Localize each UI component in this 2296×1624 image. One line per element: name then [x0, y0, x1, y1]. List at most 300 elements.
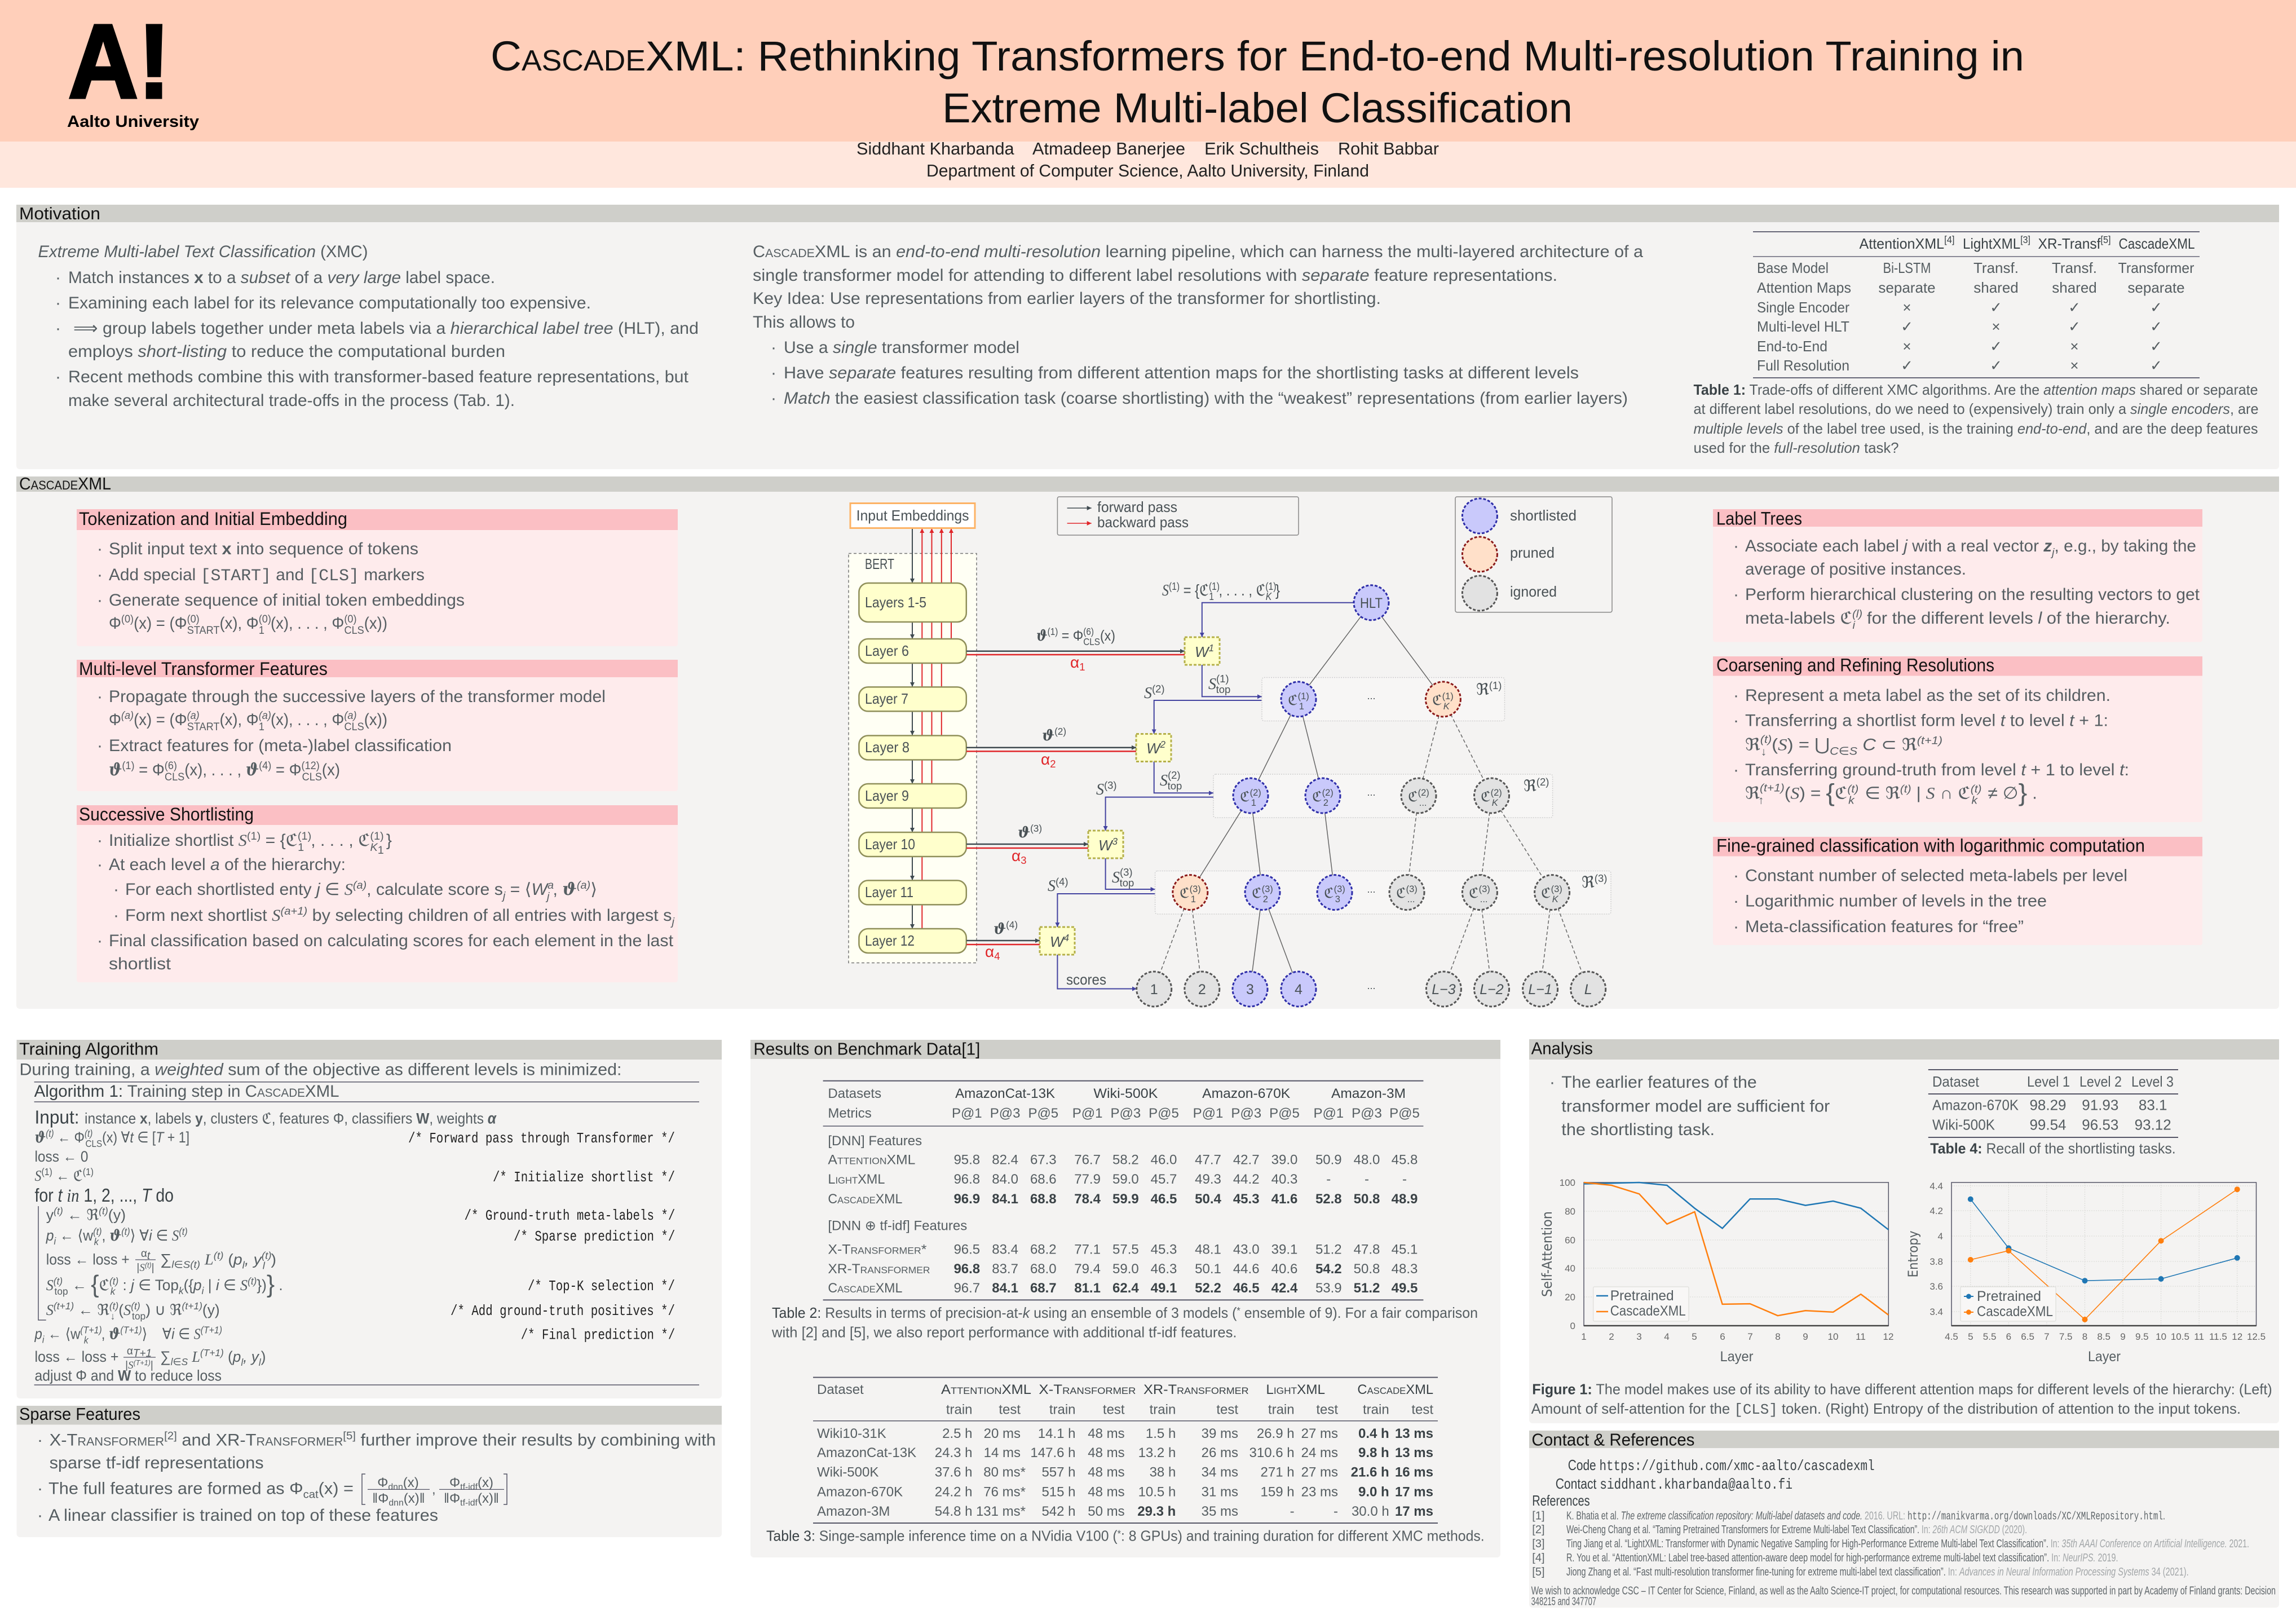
algorithm 1 pseudocode: |	[151, 1360, 153, 1371]
shortlist labels: }	[1275, 581, 1280, 599]
node labels: ℭ	[1432, 692, 1442, 708]
table 2: precision at k: 45.3	[1233, 1191, 1260, 1207]
panel: Coarsening and Refining Resolutions: Transferring a shortlist form level t to level t + 1:	[1745, 712, 2108, 730]
algorithm 1 pseudocode: ← ⟨w	[44, 1325, 81, 1342]
legend: pass direction	[1057, 497, 1299, 535]
table 1: trade-offs: ✓	[1990, 338, 2002, 355]
algorithm 1 pseudocode: l	[241, 1357, 244, 1368]
panel: Successive Shortlisting: j	[545, 890, 550, 903]
chart: entropy by layer: 4.2	[1929, 1206, 1943, 1216]
algorithm 1 pseudocode: (x) ∀	[102, 1129, 130, 1146]
table 1: trade-offs: ✓	[1901, 357, 1913, 374]
feature and weight labels: α	[1041, 751, 1050, 768]
table 1: trade-offs: ✓	[1990, 357, 2002, 374]
bullet list with formula: sparse tf-idf representations	[50, 1454, 264, 1472]
text block: XMC background: ·	[55, 294, 61, 312]
contact details: Code https://github.com/xmc-aalto/cascadexml	[1568, 1457, 1875, 1475]
text block: CascadeXML summary: This allows to	[753, 313, 855, 332]
table 2: precision at k: 78.4	[1074, 1191, 1101, 1207]
bullet list with formula: (x)‖	[478, 1491, 499, 1506]
panel: Tokenization and Initial Embedding: (0)	[187, 613, 200, 625]
table 3: inference time: XR-Transformer	[1143, 1382, 1249, 1397]
panel: Contact and References	[1529, 1430, 2279, 1608]
table 1: trade-offs: ✓	[2150, 299, 2162, 316]
algorithm 1 pseudocode: )	[261, 1348, 266, 1365]
table 2: precision at k: 40.3	[1271, 1172, 1297, 1187]
heading: Motivation: Motivation	[19, 204, 100, 223]
chart: self-attention by layer: 1	[1581, 1331, 1587, 1342]
bullet list with formula: [2]	[164, 1430, 177, 1442]
algorithm 1 pseudocode: ,	[101, 1227, 109, 1244]
panel: Results on Benchmark Data	[750, 1039, 1500, 1557]
algorithm 1 pseudocode: α	[127, 1345, 133, 1357]
text block: XMC background: Extreme Multi-label Text Classification (XMC)	[38, 242, 368, 261]
panel: Coarsening and Refining Resolutions: (	[1785, 784, 1790, 803]
algorithm 1 pseudocode: /* Final prediction */	[521, 1326, 675, 1343]
table 3: inference time: 29.3 h	[1137, 1504, 1176, 1519]
table 2: precision at k: 49.3	[1195, 1172, 1221, 1187]
table 2: precision at k: 46.5	[1233, 1281, 1260, 1296]
table 3 caption: : 8 GPUs) and training duration for different XMC methods.	[1121, 1528, 1485, 1544]
table 3: inference time: 26.9 h	[1257, 1426, 1295, 1441]
chart: entropy by layer: 10	[2156, 1331, 2166, 1342]
algorithm 1 pseudocode: :	[118, 1277, 131, 1294]
algorithm 1 pseudocode: (t)	[54, 1205, 63, 1216]
table 3: inference time: Amazon-3M	[817, 1504, 890, 1519]
table 1: trade-offs: AttentionXML	[1860, 235, 1948, 252]
panel: Coarsening and Refining Resolutions: (	[1772, 736, 1778, 754]
authors: Siddhant Kharbanda Atmadeep Banerjee Erik Schultheis Rohit Babbar	[856, 139, 1439, 158]
panel: Multi-level Transformer Features: ϑ	[109, 760, 122, 780]
table 3: inference time: 271 h	[1261, 1464, 1295, 1480]
panel: Successive Shortlisting: For each shortlisted enty j ∈ S	[125, 880, 353, 899]
table 3: inference time: 159 h	[1261, 1484, 1295, 1500]
table 2: precision at k: 59.0	[1112, 1172, 1139, 1187]
algorithm 1 pseudocode: (t)	[46, 1128, 54, 1139]
table 3: inference time: 39 ms	[1202, 1426, 1238, 1441]
algorithm 1 pseudocode: l∈S	[171, 1356, 188, 1367]
chart: entropy by layer: 5.5	[1983, 1331, 1996, 1342]
text block: XMC background: make several architectural trade-offs in the process (Tab. 1).	[68, 391, 515, 410]
panel: Successive Shortlisting: ·	[113, 880, 119, 899]
table 2: precision at k: 48.0	[1354, 1153, 1380, 1168]
table 2: precision at k: 59.9	[1112, 1191, 1139, 1207]
table 3: inference time: -	[1334, 1504, 1338, 1519]
table 2: precision at k: 53.9	[1315, 1281, 1342, 1296]
text block: CascadeXML summary: Match the easiest classification task (coarse shortlisting) with the “weakest” representations (from earlier layers)	[784, 389, 1628, 408]
panel: Tokenization and Initial Embedding: CLS	[345, 624, 364, 637]
panel: Successive Shortlisting: (1)	[298, 830, 311, 842]
algorithm 1 pseudocode: .	[275, 1277, 283, 1294]
tree nodes: shortlisted	[1233, 585, 1389, 1007]
table 2: precision at k: 77.9	[1074, 1172, 1101, 1187]
references list: Ting Jiang et al. “LightXML: Transformer with Dynamic Negative Sampling for High-Performance Extreme Multi-label Text Classification”. In: 35th AAAI Conference on Artificial Intelligence. 2021.	[1566, 1538, 2249, 1550]
algorithm 1 pseudocode: /* Sparse prediction */	[514, 1228, 675, 1245]
table 1: trade-offs: Full Resolution	[1757, 357, 1849, 374]
chart: self-attention by layer: 7	[1747, 1331, 1753, 1342]
table 3: inference time: AttentionXML	[941, 1382, 1031, 1397]
panel: Label Trees: ·	[1733, 537, 1739, 555]
table 2: precision at k: 77.1	[1074, 1242, 1101, 1257]
feature and weight labels: ϑ	[1042, 727, 1054, 744]
table 2: precision at k: 45.8	[1392, 1153, 1418, 1168]
input embeddings box: Input Embeddings	[856, 507, 969, 524]
table 2 caption: Table 2: Results in terms of precision-at-k using an ensemble of 3 models (	[772, 1304, 1246, 1321]
text block: XMC background: Match instances x to a subset of a very large label space.	[68, 268, 495, 287]
table 3: inference time: 0.4 h	[1358, 1426, 1389, 1441]
table 3: inference time: 26 ms	[1202, 1445, 1238, 1460]
panel: Multi-level Transformer Features: (x))	[364, 710, 387, 729]
chart: entropy by layer: 12	[2232, 1331, 2242, 1342]
feature and weight labels: (x)	[1100, 627, 1115, 644]
node labels: (1)	[1298, 691, 1309, 701]
text block: XMC background: employs short-listing to reduce the computational burden	[68, 342, 505, 361]
bullet list with formula: [5]	[343, 1430, 356, 1442]
heading: Sparse Features: Sparse Features	[19, 1404, 140, 1424]
layer to classifier connections	[966, 651, 1185, 945]
table 2: precision at k: 48.1	[1195, 1242, 1221, 1257]
node labels: L	[1584, 982, 1592, 998]
logo: Aalto A!: A!	[68, 3, 170, 120]
references list: [2]	[1532, 1524, 1545, 1536]
table 3: inference time: -	[1290, 1504, 1295, 1519]
shortlist labels: (3)	[1104, 779, 1117, 791]
algorithm 1 pseudocode: (T+1)	[134, 1359, 151, 1367]
table 3: inference time: LightXML	[1266, 1382, 1325, 1397]
panel: Tokenization and Initial Embedding: (x), Φ	[219, 614, 259, 633]
node labels: ...	[1367, 884, 1376, 895]
table 1: trade-offs: Bi-LSTM	[1883, 259, 1931, 276]
panel: Coarsening and Refining Resolutions: ⊂ ℜ	[1880, 736, 1913, 754]
tree edges	[1154, 603, 1588, 989]
title: CascadeXML: Rethinking Transformers for End-to-end Multi-resolution Training in	[491, 33, 2024, 80]
chart: self-attention by layer: 11	[1856, 1331, 1866, 1342]
text block: XMC background: ·	[55, 319, 61, 338]
chart: self-attention by layer	[1539, 1177, 1893, 1365]
node labels: K	[1443, 701, 1450, 712]
table 3: inference time: 48 ms	[1088, 1464, 1125, 1480]
algorithm 1 pseudocode: }	[267, 1270, 275, 1298]
bullet list with formula: further improve their results by combining with	[356, 1431, 716, 1450]
bullet: earlier features: transformer model are sufficient for	[1561, 1097, 1830, 1115]
text block: CascadeXML summary: ·	[771, 338, 776, 357]
table 2: precision at k: P@3	[990, 1106, 1020, 1121]
table 2: precision at k: 39.1	[1271, 1242, 1297, 1257]
panel: Tokenization and Initial Embedding: Tokenization and Initial Embedding	[79, 509, 347, 529]
references list: References	[1532, 1492, 1590, 1509]
table 1: trade-offs: ×	[1992, 318, 2001, 335]
panel: Multi-level Transformer Features: (a)	[187, 709, 200, 722]
algorithm 1 pseudocode: (t)	[109, 1276, 118, 1287]
legend: node states: pruned	[1510, 544, 1555, 561]
algorithm 1 pseudocode: α	[141, 1248, 147, 1260]
panel: Multi-level Transformer Features: Propagate through the successive layers of the transformer model	[109, 687, 606, 706]
table 2: precision at k: 68.8	[1030, 1191, 1057, 1207]
table 3: inference time: train	[1049, 1402, 1076, 1418]
panel: Successive Shortlisting: j	[670, 916, 675, 928]
table 3: inference time: 515 h	[1041, 1484, 1076, 1500]
text block: XMC background: Recent methods combine this with transformer-based feature representations, but	[68, 368, 689, 386]
table 2: precision at k: 67.3	[1030, 1153, 1057, 1168]
table 1: trade-offs: [3]	[2020, 234, 2030, 245]
feature and weight labels: (3)	[1030, 823, 1042, 834]
panel: Analysis	[1529, 1039, 2279, 1423]
table 4: recall: Wiki-500K	[1932, 1116, 1995, 1133]
transformer layers: Layers 1-5	[865, 594, 926, 611]
panel: Multi-level Transformer Features: = Φ	[271, 761, 302, 779]
panel: Tokenization and Initial Embedding: (x) = (Φ	[134, 614, 187, 633]
chart: entropy by layer: Entropy	[1905, 1230, 1921, 1278]
table 1: trade-offs: ✓	[2068, 318, 2081, 335]
panel: Coarsening and Refining Resolutions: k	[1971, 795, 1978, 807]
panel: Multi-level Transformer Features: 1	[259, 721, 264, 733]
node labels	[1150, 595, 1592, 998]
algorithm 1 pseudocode: top	[55, 1286, 68, 1297]
chart: self-attention by layer: Layer	[1720, 1349, 1754, 1365]
bullet list with formula: The full features are formed as Φ	[48, 1480, 297, 1498]
algorithm 1 pseudocode: ϑ	[109, 1325, 120, 1343]
table 2: precision at k: 57.5	[1112, 1242, 1139, 1257]
table 2: precision at k: Metrics	[828, 1106, 872, 1121]
intro sentence: During training, a weighted sum of the objective as different levels is minimized:	[19, 1060, 621, 1079]
table 2: precision at k: 45.3	[1151, 1242, 1177, 1257]
panel: Successive Shortlisting: (a+1)	[280, 905, 307, 917]
table 3: inference time: 24.3 h	[935, 1445, 972, 1460]
algorithm 1 pseudocode: /* Ground-truth meta-labels */	[465, 1207, 675, 1224]
node labels: ...	[1419, 798, 1427, 808]
algorithm 1 pseudocode: (1)	[41, 1166, 52, 1177]
heading: Analysis: Analysis	[1531, 1039, 1593, 1058]
panel: Successive Shortlisting: }	[386, 831, 392, 850]
table 3: inference time: 27 ms	[1301, 1426, 1338, 1441]
algorithm 1 pseudocode: i ∈ S	[149, 1227, 179, 1244]
feature and weight labels: 3	[1021, 854, 1026, 866]
table 2: precision at k: 62.4	[1112, 1281, 1139, 1296]
contact details: Contact siddhant.kharbanda@aalto.fi	[1556, 1475, 1792, 1493]
transformer layers	[859, 583, 966, 953]
heading: Contact and References: Contact & References	[1531, 1430, 1694, 1449]
table 2: precision at k	[823, 1081, 1423, 1300]
panel: Tokenization and Initial Embedding: (x))	[364, 614, 387, 633]
chart: self-attention by layer: 80	[1565, 1206, 1575, 1217]
algorithm 1 pseudocode: (t)	[109, 1300, 118, 1312]
panel: Tokenization and Initial Embedding	[77, 509, 678, 646]
shortlist labels: = {ℭ	[1180, 581, 1209, 599]
bullet list with formula: ,	[432, 1482, 436, 1497]
table 2: precision at k: 51.2	[1315, 1242, 1342, 1257]
panel: Fine-grained classification: Logarithmic number of levels in the tree	[1745, 892, 2047, 911]
chart: entropy by layer: 7.5	[2059, 1331, 2073, 1342]
table 2: precision at k: 44.2	[1233, 1172, 1260, 1187]
references list: [3]	[1532, 1538, 1545, 1550]
panel: Multi-level Transformer Features: (1)	[122, 760, 135, 772]
table 1 caption: used for the full-resolution task?	[1694, 439, 1899, 456]
shortlist labels: S	[1096, 781, 1104, 798]
table 2: precision at k: P@5	[1149, 1106, 1179, 1121]
resolution level boxes: ℜ	[1476, 681, 1489, 698]
chart: entropy by layer: 6	[2006, 1331, 2011, 1342]
panel: Label Trees: , e.g., by taking the	[2055, 537, 2196, 555]
panel: Coarsening and Refining Resolutions: }	[2019, 779, 2027, 807]
shortlist labels: S	[1162, 582, 1169, 599]
table 1: trade-offs: [4]	[1944, 234, 1954, 245]
panel: Label Trees: l of the hierarchy.	[2038, 609, 2166, 628]
chart: entropy by layer: 9	[2120, 1331, 2126, 1342]
node labels: ...	[1480, 894, 1488, 904]
node labels: (3)	[1551, 884, 1562, 894]
table 1: trade-offs: [5]	[2100, 234, 2111, 245]
panel: Coarsening and Refining Resolutions: (t)	[1971, 783, 1982, 796]
algorithm 1 pseudocode: S	[35, 1167, 42, 1184]
node labels: 3	[1246, 982, 1254, 998]
table 3: inference time: Wiki-500K	[817, 1464, 878, 1480]
chart: self-attention by layer: 12	[1883, 1331, 1893, 1342]
node labels: L−3	[1432, 982, 1456, 998]
text block: XMC background: ⟹ group labels together under meta labels via a hierarchical label tree (HLT), and	[73, 319, 699, 338]
table 3 caption: Table 3: Singe-sample inference time on a NVidia V100 (	[766, 1528, 1132, 1544]
text block: XMC background	[38, 242, 699, 410]
algorithm 1 pseudocode: p	[232, 1348, 241, 1365]
panel: Multi-level Transformer Features: = Φ	[135, 761, 165, 779]
table 3: inference time: 50 ms	[1088, 1504, 1125, 1519]
table 2: precision at k: 50.4	[1195, 1191, 1222, 1207]
table 3: inference time: 542 h	[1041, 1504, 1076, 1519]
table 3: inference time: 10.5 h	[1138, 1484, 1176, 1500]
algorithm 1 pseudocode: ← ℭ	[52, 1167, 83, 1184]
table 1 caption: Table 1: Trade-offs of different XMC algorithms. Are the attention maps shared or separate	[1694, 381, 2258, 398]
panel: Sparse Features	[17, 1404, 722, 1537]
algorithm 1 pseudocode: i	[54, 1235, 56, 1247]
feature and weight labels: 1	[1079, 661, 1085, 673]
panel: Multi-level Transformer Features: (4)	[259, 760, 271, 772]
panel: Successive Shortlisting: by selecting children of all entries with largest s	[307, 906, 672, 925]
text block: CascadeXML summary: ·	[771, 364, 776, 382]
table 3: inference time: 13 ms	[1395, 1445, 1433, 1460]
panel: Successive Shortlisting: Final classification based on calculating scores for each element in the last	[109, 932, 674, 950]
table 2: precision at k: 68.2	[1030, 1242, 1057, 1257]
legend: pass direction: forward pass	[1097, 498, 1177, 515]
algorithm 1 pseudocode: Input:	[35, 1106, 79, 1127]
table 1: trade-offs: ✓	[1901, 318, 1913, 335]
chart: entropy by layer	[1905, 1181, 2266, 1365]
feature and weight labels: α	[985, 943, 994, 960]
node labels: 2	[1323, 798, 1328, 808]
panel: Successive Shortlisting: Successive Shortlisting	[79, 804, 254, 824]
table 2: precision at k: X-Transformer*	[828, 1242, 926, 1257]
table 2 caption: ensemble of 9). For a fair comparison	[1240, 1304, 1478, 1321]
table 1: trade-offs: ✓	[2068, 299, 2081, 316]
table 3: inference time: 147.6 h	[1030, 1445, 1076, 1460]
shortlist labels: S	[1048, 877, 1056, 895]
panel: Label Trees: j	[2050, 546, 2055, 559]
panel: Coarsening and Refining Resolutions: ↑	[1758, 795, 1764, 807]
algorithm 1 pseudocode: /* Add ground-truth positives */	[451, 1303, 675, 1320]
table 2: precision at k: P@5	[1269, 1106, 1300, 1121]
algorithm 1 pseudocode: ⟩ ∀	[130, 1227, 149, 1244]
chart: entropy by layer: 7	[2044, 1331, 2050, 1342]
node labels: (2)	[1322, 788, 1334, 798]
table 3: inference time: 17 ms	[1395, 1484, 1433, 1500]
panel: Coarsening and Refining Resolutions: ℜ	[1745, 736, 1759, 754]
panel: Successive Shortlisting: Form next shortlist S	[125, 906, 280, 925]
algorithm 1 pseudocode: (y)	[202, 1301, 220, 1318]
algorithm 1 pseudocode: ,	[101, 1325, 109, 1342]
table 2: precision at k: 49.5	[1392, 1281, 1418, 1296]
table 3: inference time: 23 ms	[1301, 1484, 1338, 1500]
figure 1 caption	[1531, 1381, 2272, 1418]
node labels: (1)	[1442, 691, 1454, 701]
panel: Successive Shortlisting: = {ℭ	[260, 831, 298, 850]
panel: Coarsening and Refining Resolutions: |	[1911, 784, 1926, 803]
table 2: precision at k: 52.2	[1195, 1281, 1221, 1296]
panel: Coarsening and Refining Resolutions: (t)	[1847, 783, 1858, 796]
chart: entropy by layer: 4	[1938, 1231, 1943, 1242]
table 2: precision at k: 79.4	[1074, 1261, 1101, 1277]
table 4: recall: 96.53	[2082, 1116, 2118, 1133]
table 2: precision at k: 50.1	[1195, 1261, 1221, 1277]
chart: entropy by layer: 8.5	[2097, 1331, 2110, 1342]
bullet list with formula: ‖Φ	[444, 1491, 460, 1506]
node labels: ℭ	[1324, 885, 1334, 901]
panel: Coarsening and Refining Resolutions: C∈S	[1830, 745, 1857, 758]
node labels: ℭ	[1312, 789, 1322, 805]
chart: self-attention by layer: 40	[1565, 1263, 1575, 1274]
table 2: precision at k: P@3	[1231, 1106, 1261, 1121]
panel: Successive Shortlisting: ·	[113, 906, 119, 925]
panel: Label Trees: (l)	[1852, 608, 1862, 620]
chart: self-attention by layer: 2	[1609, 1331, 1614, 1342]
panel: Label Trees: i	[1853, 619, 1856, 632]
table 2: precision at k: AttentionXML	[828, 1153, 915, 1168]
algorithm 1 pseudocode	[34, 1082, 699, 1385]
panel: Coarsening and Refining Resolutions: Transferring ground-truth from level t + 1 to level t:	[1745, 761, 2129, 779]
algorithm 1 pseudocode: p	[193, 1277, 202, 1294]
shortlist labels: K	[1266, 590, 1272, 602]
panel: Multi-level Transformer Features: CLS	[302, 771, 322, 783]
table 2: precision at k: 52.8	[1315, 1191, 1342, 1207]
algorithm 1 pseudocode: loss ← loss +	[35, 1348, 118, 1365]
chart: self-attention by layer: 0	[1570, 1321, 1575, 1331]
table 2: precision at k: 68.0	[1030, 1261, 1057, 1277]
table 2: precision at k: 45.1	[1392, 1242, 1418, 1257]
table 1 caption: at different label resolutions, do we need to (expensively) train only a single encoders, are	[1694, 400, 2259, 417]
table 3: inference time: 310.6 h	[1249, 1445, 1295, 1460]
panel: Tokenization and Initial Embedding: START	[187, 624, 219, 637]
table 3: inference time: 27 ms	[1301, 1464, 1338, 1480]
table 3: inference time: CascadeXML	[1357, 1382, 1433, 1397]
transformer layers: Layer 12	[865, 932, 915, 949]
references list: R. You et al. “AttentionXML: Label tree-based attention-aware deep model for high-performance extreme multi-label text classification”. In: NeurIPS. 2019.	[1566, 1552, 2118, 1564]
resolution level boxes: (2)	[1536, 776, 1549, 788]
table 3 caption: *	[1118, 1528, 1121, 1539]
table 2: precision at k: 50.9	[1315, 1153, 1342, 1168]
table 3: inference time: 17 ms	[1395, 1504, 1433, 1519]
bullet list with formula: and	[177, 1431, 215, 1450]
references list: Wei-Cheng Chang et al. “Taming Pretrained Transformers for Extreme Multi-label Text Classification”. In: 26th ACM SIGKDD (2020).	[1566, 1524, 2027, 1536]
bullet: earlier features: The earlier features of the	[1561, 1073, 1757, 1092]
shortlist labels: S	[1144, 685, 1152, 702]
table 2: precision at k: Amazon-3M	[1331, 1086, 1406, 1101]
resolution level boxes: ℜ	[1524, 777, 1536, 795]
algorithm 1 pseudocode: ← ⟨w	[56, 1227, 94, 1244]
classifier boxes: 3	[1112, 836, 1118, 847]
panel: Label Trees: Label Trees	[1716, 509, 1802, 529]
panel: Coarsening and Refining Resolutions: .	[2027, 784, 2037, 803]
table 2: precision at k: 68.7	[1030, 1281, 1057, 1296]
shortlist labels: scores	[1066, 971, 1106, 988]
panel: Coarsening and Refining Resolutions: S) = ⋃	[1778, 736, 1826, 754]
chart: entropy by layer: Layer	[2088, 1349, 2121, 1365]
